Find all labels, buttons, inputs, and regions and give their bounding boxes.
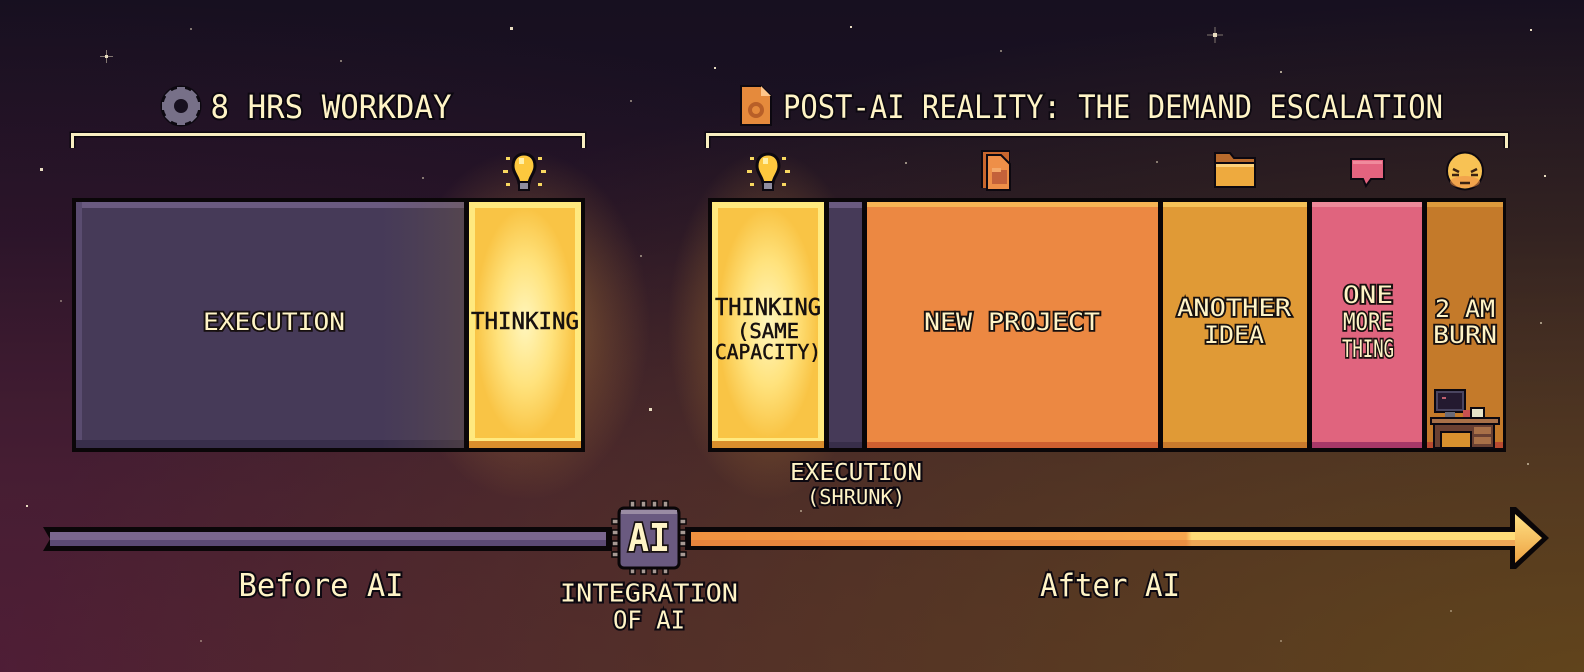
panel: 2 am burn: BURN — [1433, 321, 1497, 349]
panel: thinking same capacity: (SAME — [737, 319, 799, 343]
panel: thinking — [469, 202, 581, 448]
panel: thinking same capacity: THINKING — [715, 295, 821, 321]
panel: one more thing: MORE — [1343, 308, 1393, 336]
label: integration of AI: INTEGRATION — [560, 578, 738, 608]
icon: light bulb left — [503, 154, 546, 190]
timeline arrow: before AI — [43, 527, 612, 551]
left bracket — [72, 134, 584, 148]
panel: thinking same capacity: CAPACITY) — [715, 340, 821, 364]
label: execution shrunk: (SHRUNK) — [807, 485, 905, 509]
icon: folder — [1215, 153, 1255, 187]
thinking glow: left — [400, 150, 650, 500]
panel: one more thing: THING — [1342, 335, 1394, 363]
panel: another idea — [1163, 202, 1307, 448]
right bracket line — [708, 134, 1506, 148]
label: before AI: Before AI — [238, 568, 404, 604]
panel: new project — [867, 202, 1158, 448]
panel: post-AI reality — [708, 198, 1506, 452]
panel: another idea: IDEA — [1204, 321, 1265, 349]
icon: gear — [162, 87, 200, 125]
icon: speech bubble — [1351, 159, 1384, 186]
heading: 8 hrs workday: 8 HRS WORKDAY — [210, 88, 452, 126]
icon: desk with computer — [1431, 390, 1499, 448]
left bracket line — [72, 134, 584, 148]
icon: AI chip: AI — [628, 516, 670, 560]
icon: light bulb right — [747, 154, 790, 190]
label: execution shrunk: EXECUTION — [790, 460, 922, 486]
icon: AI chip — [612, 501, 686, 574]
right bracket — [708, 134, 1506, 148]
panel: new project: NEW PROJECT — [924, 308, 1100, 336]
panel: execution shrunk — [829, 202, 862, 448]
panel: 8 hrs workday — [72, 198, 585, 452]
label: integration of AI: OF AI — [613, 606, 685, 634]
panel: 2 am burn — [1427, 202, 1503, 448]
label: after AI: After AI — [1040, 568, 1180, 604]
panel: execution: EXECUTION — [203, 308, 345, 336]
panel: 2 am burn: 2 AM — [1435, 295, 1495, 323]
panel: thinking: THINKING — [471, 309, 579, 335]
heading: post-AI reality: POST-AI REALITY: THE DEMAND ESCALATION — [783, 88, 1443, 126]
panel: another idea: ANOTHER — [1177, 294, 1292, 322]
thinking glow: right — [668, 150, 868, 500]
icon: tired face — [1447, 152, 1483, 190]
label: execution shrunk — [790, 460, 922, 509]
panel: one more thing — [1312, 202, 1422, 448]
label: integration of AI — [560, 578, 738, 634]
panel: execution — [76, 202, 464, 448]
panel: thinking same capacity — [712, 202, 824, 448]
timeline arrow: after AI — [685, 507, 1549, 569]
panel: one more thing: ONE — [1343, 281, 1393, 309]
icon: orange document — [741, 86, 771, 125]
icon: document — [981, 150, 1010, 190]
